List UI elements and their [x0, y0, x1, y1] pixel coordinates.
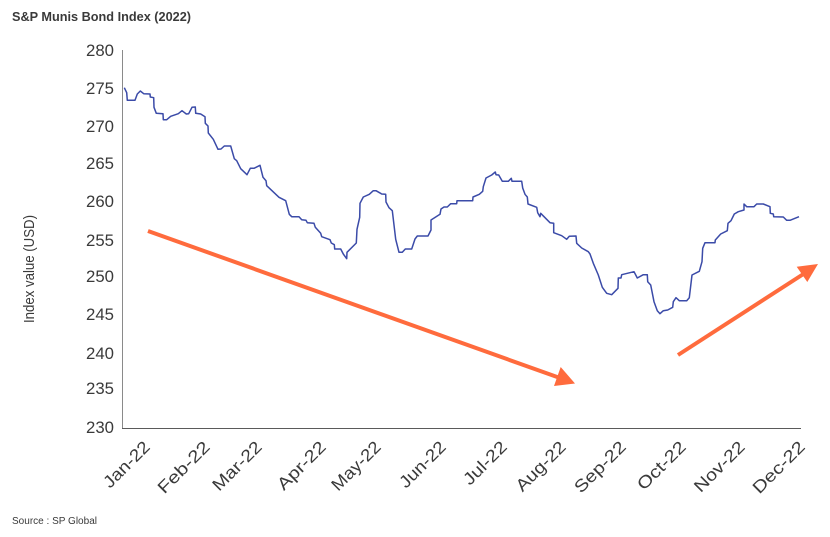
arrow: downward trend	[148, 231, 575, 386]
y axis tick labels: 275	[86, 79, 114, 98]
y axis tick labels: 235	[86, 379, 114, 398]
x axis month labels: Feb-22	[154, 437, 214, 497]
x axis month labels: Dec-22	[749, 437, 809, 497]
x axis month labels: Aug-22	[512, 437, 570, 495]
y axis tick labels: 255	[86, 231, 114, 250]
x axis month labels	[99, 437, 809, 497]
x axis month labels: Jul-22	[459, 437, 511, 489]
y axis tick labels: 230	[86, 418, 114, 437]
y axis tick labels: 245	[86, 305, 114, 324]
y axis title: Index value (USD)	[21, 215, 38, 323]
x axis month labels: Sep-22	[570, 437, 630, 497]
y axis tick labels: 270	[86, 117, 114, 136]
chart axes	[122, 50, 801, 428]
x axis month labels: Mar-22	[209, 437, 266, 495]
y axis tick labels: 240	[86, 344, 114, 363]
x axis month labels: Jan-22	[99, 437, 154, 492]
x axis month labels: Jun-22	[395, 437, 450, 492]
y axis tick labels: 265	[86, 154, 114, 173]
source note: Source : SP Global	[12, 516, 97, 527]
y axis tick labels: 250	[86, 267, 114, 286]
title: S&P Munis Bond Index (2022)	[12, 9, 191, 24]
index value line	[124, 88, 799, 314]
y axis tick labels: 260	[86, 192, 114, 211]
x axis month labels: May-22	[328, 437, 385, 495]
y axis tick labels: 280	[86, 41, 114, 60]
x axis month labels: Apr-22	[273, 437, 330, 494]
arrow: upward trend	[678, 264, 818, 355]
x axis month labels: Oct-22	[633, 437, 690, 494]
x axis month labels: Nov-22	[690, 437, 749, 496]
y axis tick labels	[86, 41, 114, 437]
